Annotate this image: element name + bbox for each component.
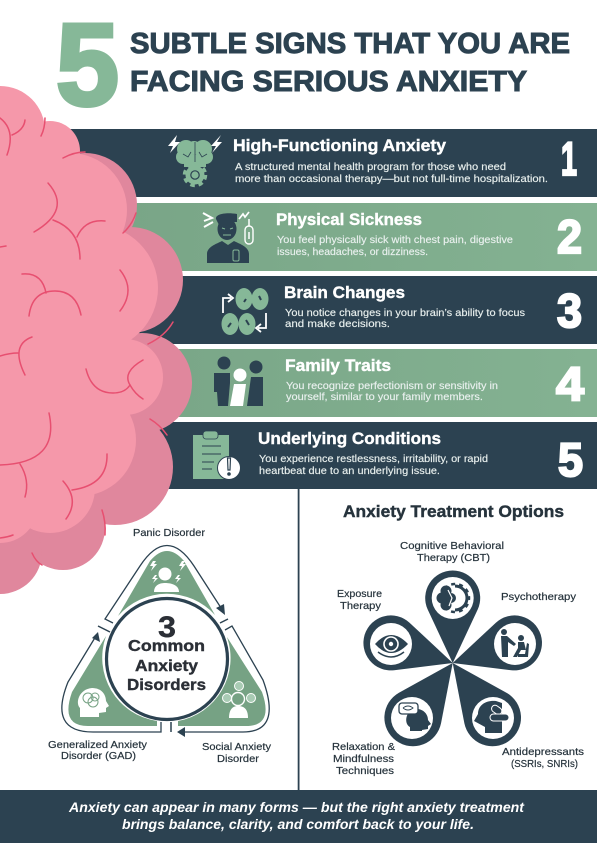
heading: sign 1: High-Functioning Anxiety: [233, 136, 447, 155]
labels: Psychotherapy: [501, 591, 577, 603]
text: sign 4: You recognize perfectionism or sensitivity in: [286, 381, 498, 392]
heading: sign 4: Family Traits: [285, 356, 391, 375]
number 4: 4: [556, 357, 584, 410]
icon: panic person: [150, 561, 186, 592]
labels: [332, 540, 584, 777]
panel: sign 1 bar: [0, 129, 597, 197]
label: GAD: Generalized Anxiety: [48, 739, 148, 751]
green segment: left: [68, 636, 157, 726]
centre text: Common: [128, 638, 205, 655]
centre circle: [106, 598, 228, 720]
petals: [356, 571, 549, 758]
heading: sign 2: Physical Sickness: [276, 210, 422, 229]
green segment: top: [118, 551, 215, 616]
footer banner: brings balance, clarity, and comfort back to your life.: [122, 816, 474, 832]
big number 5: 5: [56, 0, 119, 130]
panel: sign 5 bar: [0, 422, 597, 489]
labels: Therapy (CBT): [417, 552, 490, 564]
text: sign 1: A structured mental health program for those who need: [235, 162, 506, 173]
icon: brain with gear: [168, 135, 222, 186]
icon: family: [214, 356, 263, 406]
icon: mindful head: [391, 697, 433, 739]
title: SUBTLE SIGNS THAT YOU ARE: [130, 28, 570, 60]
footer banner: [0, 790, 597, 843]
icon: GAD head: [78, 688, 109, 717]
centre text: 3: [158, 611, 176, 644]
chart: 3 common disorders cycle: [48, 527, 272, 765]
centre text: Disorders: [127, 677, 206, 694]
heading: treatment options: Anxiety Treatment Options: [343, 503, 564, 521]
icon: sick person: [203, 212, 253, 263]
labels: Techniques: [336, 765, 394, 777]
text: sign 3: and make decisions.: [285, 319, 390, 330]
arrowheads: [92, 604, 225, 737]
text: sign 1: [235, 162, 548, 185]
text: sign 5: heartbeat due to an underlying issue.: [259, 466, 440, 477]
centre text: [127, 611, 206, 694]
text: sign 2: issues, headaches, or dizziness.: [277, 247, 428, 258]
icon: eye target: [370, 623, 412, 665]
footer banner: Anxiety can appear in many forms — but the right anxiety treatment: [68, 799, 525, 815]
number 1: 1: [561, 132, 577, 185]
heading: sign 5: Underlying Conditions: [258, 429, 441, 448]
labels: Relaxation &: [332, 741, 395, 753]
cycle arrows: [62, 546, 269, 732]
title: FACING SERIOUS ANXIETY: [130, 66, 527, 98]
label: GAD: [48, 739, 148, 762]
text: sign 1: more than occasional therapy—but not full-time hospitalization.: [235, 174, 548, 185]
labels: (SSRIs, SNRIs): [511, 758, 578, 770]
labels: Therapy: [340, 600, 382, 612]
icon: pill head: [472, 697, 514, 739]
label: panic disorder: Panic Disorder: [133, 527, 206, 539]
labels: Exposure: [337, 588, 382, 600]
brain illustration: [0, 86, 192, 594]
text: sign 4: [286, 381, 498, 403]
heading: sign 3: Brain Changes: [284, 283, 405, 302]
text: sign 5: [259, 454, 488, 477]
icon: social person: [222, 682, 256, 718]
labels: Cognitive Behavioral: [400, 540, 504, 552]
label: GAD: Disorder (GAD): [61, 750, 136, 762]
label: social anxiety: Social Anxiety: [202, 741, 272, 753]
title: [130, 28, 570, 98]
panel: sign 3 bar: [0, 276, 597, 344]
panel: sign 4 bar: [0, 349, 597, 417]
text: sign 2: [277, 235, 513, 258]
centre text: Anxiety: [135, 658, 198, 675]
icon: CBT gear brain: [432, 577, 474, 619]
icon: clipboard: [193, 431, 240, 480]
number 3: 3: [557, 284, 582, 337]
icon: brain changes: [222, 288, 268, 335]
number 2: 2: [557, 210, 582, 263]
text: sign 3: [285, 308, 525, 330]
number 5: 5: [558, 433, 583, 486]
labels: Antidepressants: [502, 746, 584, 758]
text: sign 3: You notice changes in your brain’s ability to focus: [285, 308, 525, 319]
label: social anxiety: Disorder: [217, 753, 260, 765]
text: sign 4: yourself, similar to your family members.: [286, 392, 483, 403]
panel: sign 2 bar: [0, 203, 597, 271]
green segment: right: [178, 637, 266, 726]
icon: therapy people: [494, 623, 536, 665]
text: sign 5: You experience restlessness, irritability, or rapid: [259, 454, 488, 465]
labels: Mindfulness: [333, 753, 394, 765]
chart: treatment flower: [332, 540, 584, 777]
label: social anxiety: [202, 741, 272, 765]
text: sign 2: You feel physically sick with chest pain, digestive: [277, 235, 513, 246]
